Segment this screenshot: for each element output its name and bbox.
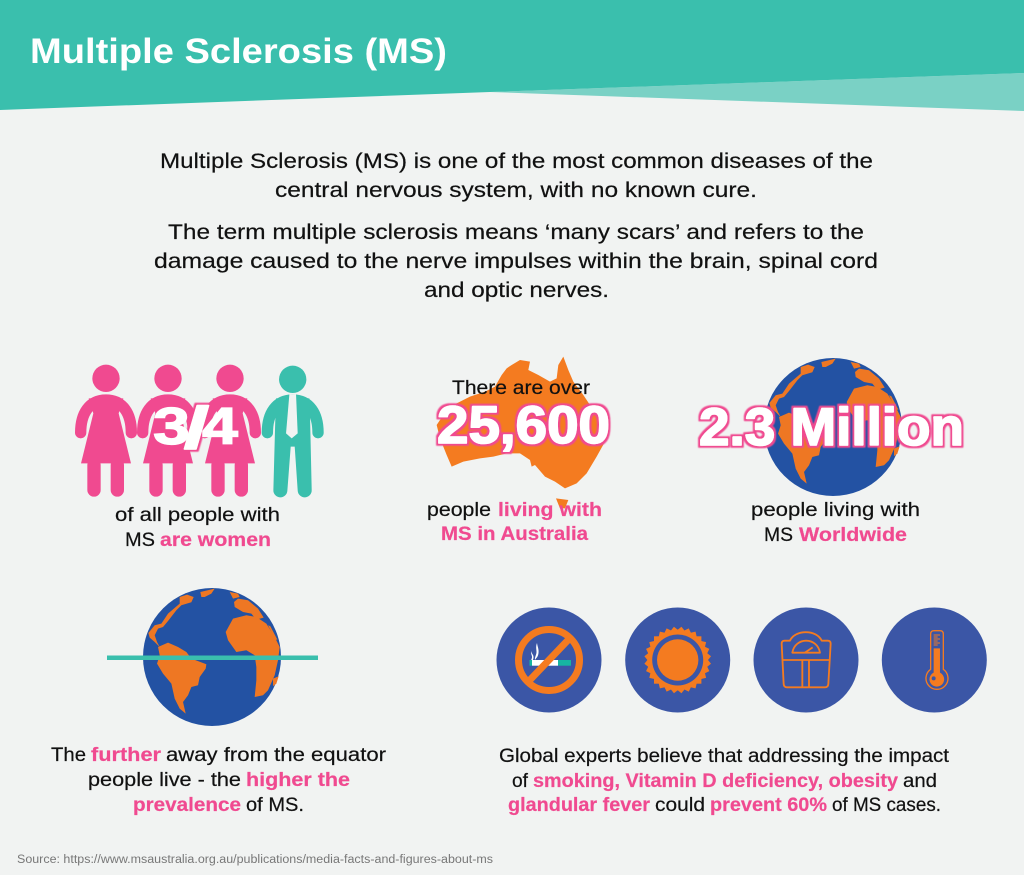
icon: thermometer [882, 608, 987, 712]
caption [427, 500, 602, 545]
stat: 3/4: 4 [202, 398, 238, 456]
caption: The [51, 745, 86, 766]
icon: globe with equator line [107, 588, 318, 726]
title: Multiple Sclerosis (MS) [30, 32, 447, 71]
caption: glandular fever [508, 795, 651, 816]
caption: MS [125, 530, 155, 551]
stat: 3/4 [153, 396, 238, 461]
panel: people with MS worldwide [699, 358, 964, 546]
caption: people [427, 500, 491, 521]
caption [51, 745, 387, 816]
caption: are women [160, 530, 271, 551]
caption: of MS cases. [832, 795, 941, 816]
caption: higher the [246, 770, 350, 791]
panel: three quarters are women [81, 365, 318, 551]
caption [499, 746, 950, 816]
caption: prevalence [133, 795, 241, 816]
caption: further [91, 745, 162, 766]
caption: away from the equator [166, 745, 387, 766]
text: there are over: There are over [452, 378, 591, 399]
panel: people with MS in Australia [427, 357, 610, 545]
icon: map of Australia [437, 357, 605, 508]
stat: 25,600: 25,600 [437, 396, 610, 455]
caption: could [655, 795, 705, 816]
caption: of all people with [115, 505, 280, 526]
header banner [0, 0, 1024, 111]
intro text block: and optic nerves. [424, 279, 609, 302]
caption: of [512, 771, 529, 792]
caption: people live - the [88, 770, 241, 791]
panel: equator prevalence [51, 588, 387, 816]
stat: 3/4: 3 [153, 398, 190, 456]
intro text block [154, 150, 878, 302]
caption: MS [764, 525, 793, 546]
intro text block: damage caused to the nerve impulses within the brain, spinal cord [154, 250, 878, 273]
icon: weighing scale [754, 608, 858, 712]
caption [751, 500, 920, 546]
stat: 3/4: / [184, 396, 209, 461]
caption [115, 505, 280, 551]
light teal wedge [490, 73, 1024, 111]
panel: preventable risk factors [496, 608, 987, 816]
caption: of MS. [246, 795, 304, 816]
caption: and [903, 771, 937, 792]
intro text block: Multiple Sclerosis (MS) is one of the most common diseases of the [160, 150, 873, 173]
stat: 2.3 Million: 2.3 Million [699, 398, 964, 457]
icon: globe [764, 358, 902, 496]
caption: MS in Australia [441, 524, 588, 545]
icon: sun [625, 608, 730, 712]
intro text block: central nervous system, with no known cure. [275, 179, 757, 202]
caption: smoking, Vitamin D deficiency, obesity [533, 771, 898, 792]
caption: Worldwide [799, 525, 907, 546]
icon: no smoking [496, 608, 602, 712]
icon: women and man figures [81, 365, 318, 497]
caption: living with [498, 500, 602, 521]
caption: Global experts believe that addressing the impact [499, 746, 950, 767]
caption: prevent 60% [710, 795, 827, 816]
intro text block: The term multiple sclerosis means ‘many scars’ and refers to the [168, 221, 864, 244]
caption: people living with [751, 500, 920, 521]
source footnote: Source: https://www.msaustralia.org.au/publications/media-facts-and-figures-about-ms [17, 854, 493, 866]
teal band [0, 0, 1024, 110]
